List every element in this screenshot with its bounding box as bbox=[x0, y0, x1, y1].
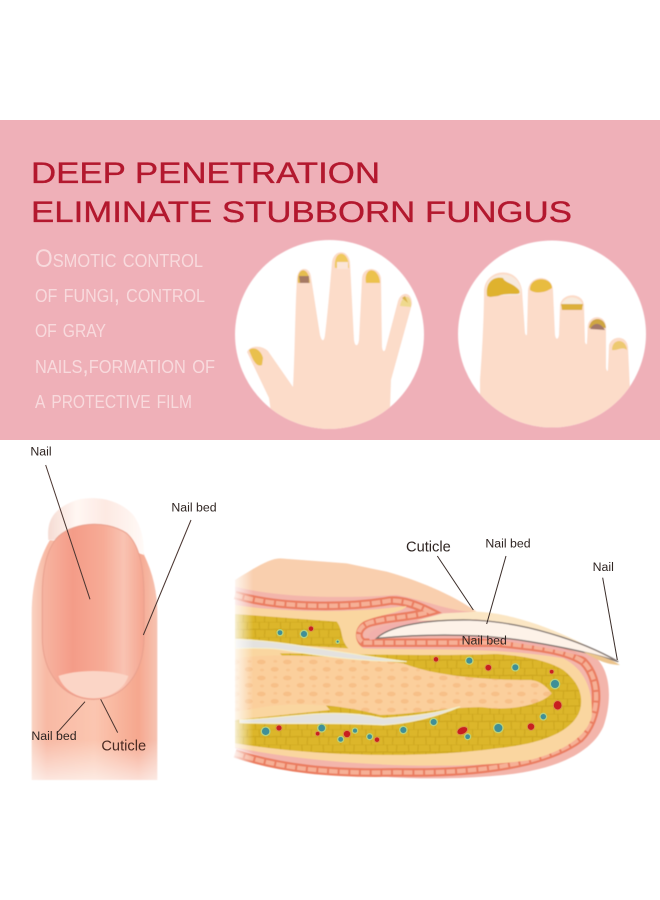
nail bed layer bbox=[369, 621, 590, 658]
icon: second toenail bbox=[530, 279, 552, 292]
heading bbox=[31, 157, 572, 229]
labels bbox=[406, 536, 614, 647]
heading: DEEP PENETRATION bbox=[31, 157, 380, 190]
nail tip bbox=[48, 498, 144, 555]
labels: Cuticle bbox=[101, 739, 146, 755]
icon: index nail bbox=[298, 270, 310, 283]
text block: description: Osmotic control bbox=[35, 245, 203, 273]
lunula bbox=[58, 671, 128, 698]
bone bbox=[235, 656, 552, 715]
labels: Nail bbox=[30, 445, 52, 459]
icon: fourth toenail bbox=[589, 319, 606, 330]
anatomy drawing bbox=[235, 558, 620, 778]
icon: middle nail bbox=[335, 254, 349, 269]
text block: description: nails,formation of bbox=[35, 351, 215, 379]
icon: big toenail bbox=[486, 274, 521, 297]
icon: third toenail bbox=[561, 298, 583, 310]
panel: fingertip diagram bbox=[30, 445, 217, 781]
icon: little toenail bbox=[612, 341, 627, 350]
labels: Nail bed bbox=[31, 729, 77, 743]
icon: little finger nail bbox=[400, 296, 411, 307]
labels: Nail bed bbox=[171, 501, 217, 515]
icon: foot with infected toenails bbox=[458, 240, 646, 440]
labels: Nail bbox=[593, 560, 614, 574]
outer skin layer bbox=[235, 587, 609, 778]
icon: thumb nail bbox=[249, 348, 263, 366]
text block: description: of gray bbox=[35, 315, 106, 343]
left edge fade bbox=[230, 557, 253, 780]
panel: cross-section diagram bbox=[230, 536, 620, 780]
leader lines bbox=[437, 556, 617, 660]
inner peach tissue bbox=[235, 605, 592, 766]
text block: description: a protective film bbox=[35, 386, 192, 414]
heading: ELIMINATE STUBBORN FUNGUS bbox=[31, 196, 572, 229]
finger bbox=[31, 540, 158, 781]
tendons bbox=[235, 639, 460, 725]
skin fold bbox=[235, 558, 477, 615]
text block: description: of fungi, control bbox=[35, 280, 205, 308]
panel: pink banner bbox=[0, 120, 660, 440]
fat layer bbox=[235, 614, 581, 755]
icon: hand with infected nails bbox=[235, 240, 424, 440]
labels: Nail bed bbox=[485, 536, 531, 550]
labels: Cuticle bbox=[406, 540, 451, 556]
labels: Nail bed bbox=[462, 633, 507, 647]
text block: description bbox=[35, 245, 215, 414]
red dermis band bbox=[235, 595, 596, 773]
blood vessels bbox=[261, 626, 562, 742]
icon: ring nail bbox=[366, 270, 380, 283]
labels bbox=[30, 445, 217, 755]
nail plate bbox=[377, 612, 620, 665]
nail plate bbox=[42, 524, 144, 699]
leader lines bbox=[46, 465, 191, 733]
